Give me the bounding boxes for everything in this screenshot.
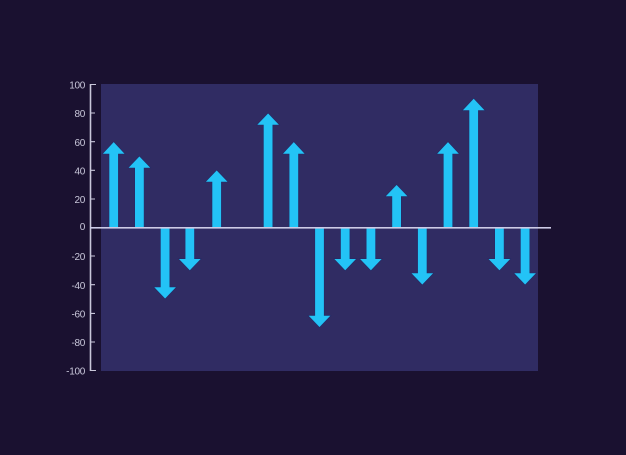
- arrow up 50: [128, 156, 151, 228]
- y axis labels: 80: [74, 109, 86, 120]
- arrow up 60: [102, 142, 125, 228]
- zero baseline: [90, 227, 551, 229]
- panel: plot background: [101, 84, 538, 371]
- y axis with ticks: [90, 84, 96, 371]
- y axis labels: 100: [69, 80, 86, 92]
- y axis labels: -40: [71, 281, 86, 292]
- y axis labels: -100: [66, 366, 86, 378]
- arrow down -30: [359, 228, 382, 271]
- arrow down -70: [308, 228, 331, 328]
- y axis labels: 20: [74, 195, 86, 206]
- arrow up 30: [385, 184, 408, 228]
- arrows: data series: [102, 98, 537, 328]
- arrow up 90: [462, 98, 485, 228]
- arrow up 60: [282, 142, 305, 228]
- y axis labels: 40: [74, 166, 86, 178]
- y axis labels: [66, 80, 86, 378]
- arrow up 80: [257, 113, 280, 228]
- y axis labels: -20: [71, 252, 86, 263]
- arrow down -30: [334, 228, 357, 271]
- arrow up 60: [436, 142, 460, 228]
- arrow up 40: [205, 170, 228, 228]
- y axis labels: 60: [74, 138, 86, 149]
- y axis labels: -80: [71, 338, 86, 349]
- arrow down -40: [411, 228, 434, 285]
- y axis labels: 0: [80, 222, 86, 233]
- arrow down -40: [514, 228, 537, 285]
- arrow down -30: [488, 228, 511, 271]
- arrow down -30: [178, 228, 201, 271]
- arrow down -50: [154, 228, 177, 299]
- y axis labels: -60: [71, 310, 86, 320]
